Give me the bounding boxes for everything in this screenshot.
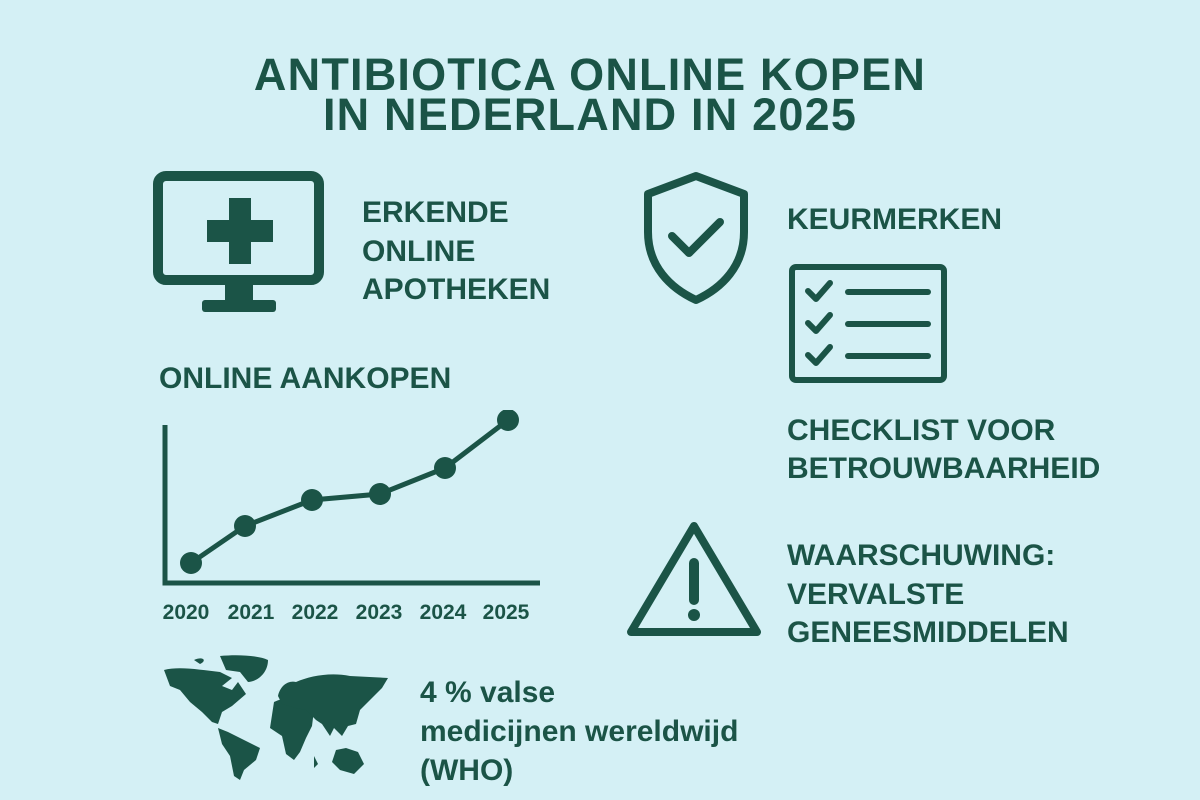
title: IN NEDERLAND IN 2025 [323, 89, 857, 140]
text: 4% valse medicijnen: medicijnen wereldwijd [420, 715, 738, 748]
text: keurmerken: KEURMERKEN [787, 203, 1002, 236]
icon: monitor with cross [153, 171, 324, 312]
text: checklist voor betrouwbaarheid: CHECKLIST VOOR [787, 414, 1055, 447]
title [254, 49, 926, 140]
line chart: 2023 [356, 601, 402, 624]
text: checklist voor betrouwbaarheid [787, 414, 1100, 485]
text: checklist voor betrouwbaarheid: BETROUWBAARHEID [787, 452, 1100, 485]
text: 4% valse medicijnen [420, 676, 738, 787]
text: 4% valse medicijnen: 4 % valse [420, 676, 555, 709]
line chart [162, 410, 540, 624]
icon: shield [644, 172, 748, 304]
text: waarschuwing [787, 539, 1069, 649]
text: waarschuwing: WAARSCHUWING: [787, 539, 1055, 572]
text: waarschuwing: VERVALSTE [787, 578, 964, 610]
line chart: 2020 [163, 601, 209, 624]
icon: world map [164, 655, 388, 780]
text: erkende online apotheken: ONLINE [362, 234, 475, 268]
text: erkende online apotheken: ERKENDE [362, 196, 509, 229]
line chart: 2025 [483, 601, 530, 624]
line chart: 2024 [420, 601, 467, 624]
icon: checklist [789, 264, 947, 383]
text: 4% valse medicijnen: (WHO) [420, 754, 513, 787]
text: erkende online apotheken: APOTHEKEN [362, 273, 550, 306]
heading: online aankopen: ONLINE AANKOPEN [159, 362, 451, 395]
icon: warning triangle [627, 522, 761, 636]
text: waarschuwing: GENEESMIDDELEN [787, 616, 1069, 649]
text: erkende online apotheken [362, 196, 550, 306]
title: ANTIBIOTICA ONLINE KOPEN [254, 49, 926, 100]
line chart: 2021 [228, 601, 275, 624]
line chart: 2022 [292, 601, 338, 624]
